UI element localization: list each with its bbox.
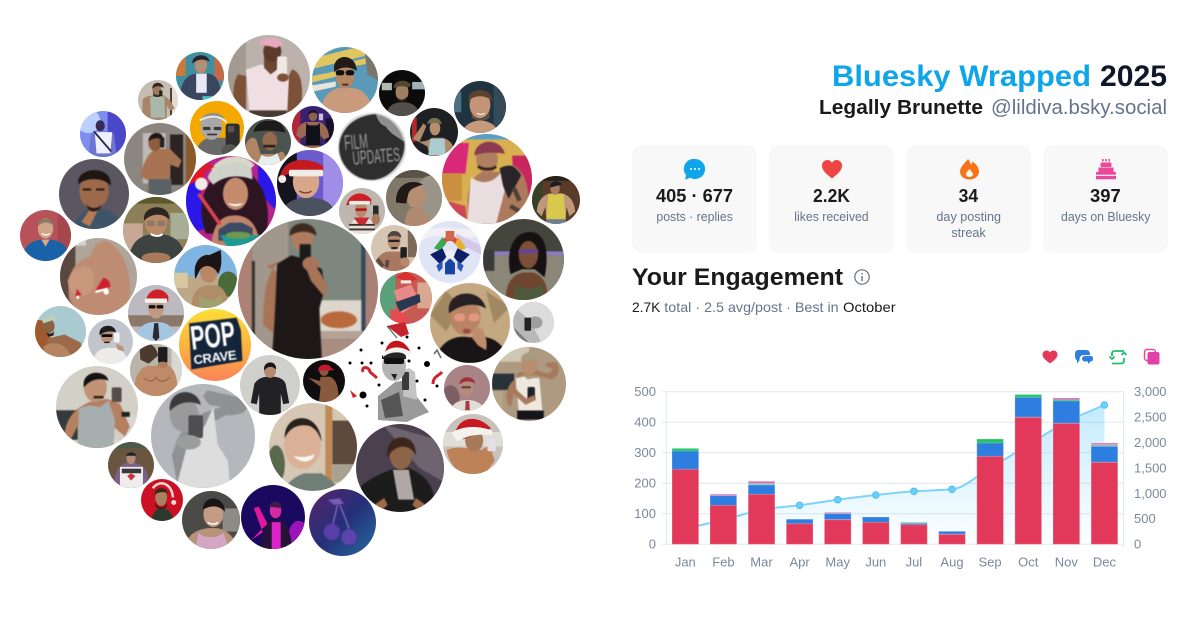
stat card: streak xyxy=(906,145,1031,253)
avatar: cherries xyxy=(309,489,376,556)
christmas cutout sticker xyxy=(345,320,455,430)
icon: info xyxy=(855,270,869,284)
right axis labels xyxy=(1134,384,1167,552)
stat card: posts and replies: 405 · 677 xyxy=(656,186,733,206)
avatar: beach sunglasses xyxy=(312,47,378,113)
avatar: comic xyxy=(380,272,432,324)
cumulative area xyxy=(685,405,1104,544)
avatar: red hat rosy xyxy=(444,365,490,411)
stat card: days on Bluesky xyxy=(1043,145,1168,253)
bar: Jul xyxy=(901,522,927,544)
avatar: plaid shirt xyxy=(176,52,224,100)
bar: Jun xyxy=(862,517,889,544)
month labels: Aug xyxy=(940,554,964,570)
stat card: likes: 2.2K xyxy=(813,186,850,206)
stat card: days on Bluesky: 397 xyxy=(1090,186,1121,206)
avatar: han solo xyxy=(356,424,444,512)
avatar: blue shirt xyxy=(20,210,71,261)
engagement summary: total · 2.5 avg/post · Best in xyxy=(664,299,839,315)
avatar: necklace sunny xyxy=(174,245,237,308)
avatar: rainbow badge xyxy=(419,221,481,283)
right axis labels: 0 xyxy=(1134,536,1141,552)
bar: Apr xyxy=(786,519,813,544)
avatar: glasses selfie tattoos xyxy=(371,225,417,271)
avatar: sunglasses hoodie pout xyxy=(430,283,510,363)
line markers xyxy=(796,402,1108,509)
avatar: santa on red xyxy=(141,479,183,521)
stat card: streak: 34 xyxy=(959,186,978,206)
icon: reply bubbles xyxy=(1075,350,1093,364)
right axis labels: 1,500 xyxy=(1134,460,1167,476)
title: Bluesky Wrapped xyxy=(832,60,1091,93)
right axis labels: 3,000 xyxy=(1134,384,1167,399)
avatar: mirror grey tank xyxy=(56,366,138,448)
avatar: green tee smile xyxy=(123,197,189,263)
user name and handle: @lildiva.bsky.social xyxy=(991,97,1167,119)
avatar: yellow tank xyxy=(532,176,580,224)
avatar: bedroom flex xyxy=(492,347,566,421)
avatar: pool cap tattoos xyxy=(442,134,532,224)
avatar: santa woman xyxy=(186,156,276,246)
avatar: bare chest santa hats xyxy=(60,238,137,315)
left axis labels: 100 xyxy=(634,506,656,521)
bar: Jan xyxy=(672,448,699,544)
right axis labels: 2,000 xyxy=(1134,435,1167,450)
left axis labels: 400 xyxy=(634,414,656,430)
avatar: black and white flex xyxy=(151,384,255,488)
left axis labels: 0 xyxy=(649,536,656,552)
avatar: film updates logo: FILM xyxy=(343,130,369,155)
bar: Nov xyxy=(1053,398,1080,544)
left axis labels: 300 xyxy=(634,445,656,460)
avatar: pop crave logo: CRAVE xyxy=(193,347,238,367)
bar: Dec xyxy=(1091,443,1118,544)
engagement summary xyxy=(632,299,896,315)
bar: May xyxy=(824,512,851,544)
avatar: game character xyxy=(483,219,564,300)
right axis labels: 2,500 xyxy=(1134,410,1167,424)
bar and line chart xyxy=(634,384,1167,570)
avatar: purple tank xyxy=(292,106,334,148)
avatar: purple party xyxy=(241,485,305,549)
icon: flame xyxy=(960,159,979,180)
icon: like heart xyxy=(1042,350,1058,364)
icon: cake xyxy=(1096,159,1116,179)
month labels: Feb xyxy=(712,554,735,570)
avatar: pink bandana xyxy=(228,35,310,117)
avatar: shirtless phone xyxy=(130,344,182,396)
avatar: santa striped xyxy=(339,188,385,234)
avatar: pink tank xyxy=(182,491,240,549)
bar: Sep xyxy=(977,439,1004,544)
stat card: streak: streak xyxy=(951,226,986,240)
icon: chat bubble xyxy=(684,159,705,179)
stat card: posts and replies: posts · replies xyxy=(656,210,733,224)
user name and handle: Legally Brunette xyxy=(819,97,983,119)
month labels: Mar xyxy=(750,554,773,570)
avatar: profile neck xyxy=(386,170,442,226)
icon: repost arrows xyxy=(1110,351,1126,364)
avatar: yellow backdrop cap xyxy=(190,101,244,155)
month labels: Jul xyxy=(906,554,922,570)
avatar: blue lit xyxy=(80,111,126,157)
avatar: big smile selfie xyxy=(269,403,357,491)
avatar: santa hat blue wall xyxy=(277,150,343,216)
avatar: big central mirror selfie xyxy=(238,219,378,359)
avatar: mirror shirtless xyxy=(124,123,196,195)
heading: your engagement: Your Engagement xyxy=(632,264,843,291)
avatar: black shirtless red cap xyxy=(303,360,345,402)
stat card: likes xyxy=(769,145,894,253)
icon: quote squares xyxy=(1144,350,1160,364)
month labels: Jun xyxy=(865,554,886,570)
right axis labels: 1,000 xyxy=(1134,486,1167,501)
bar: Feb xyxy=(710,494,737,544)
avatar: dark car hat xyxy=(379,70,425,116)
month labels: Sep xyxy=(979,554,1002,570)
month labels: Jan xyxy=(675,554,696,570)
cumulative line xyxy=(685,405,1104,528)
avatar: film updates logo xyxy=(338,112,406,182)
bar: Aug xyxy=(939,531,965,544)
engagement summary: October xyxy=(843,299,896,315)
avatar: cowboy hat xyxy=(245,119,291,165)
bars xyxy=(672,394,1118,544)
legend: likes, replies, reposts, quotes xyxy=(1042,350,1160,364)
month labels: Apr xyxy=(789,554,810,570)
engagement summary: 2.7K xyxy=(632,299,661,315)
month labels: Nov xyxy=(1055,554,1078,570)
left axis labels xyxy=(634,384,656,552)
month labels: May xyxy=(825,554,850,570)
avatar: dark close-up xyxy=(59,159,129,229)
avatar: mirror tank xyxy=(138,80,178,120)
avatar: sunglasses white tee xyxy=(88,319,133,364)
grid and axes xyxy=(662,392,1124,548)
avatar: santa shirtless xyxy=(443,414,503,474)
avatar collage xyxy=(20,35,580,556)
avatar: monochrome lying xyxy=(513,302,554,343)
avatar: stubble xyxy=(454,81,506,133)
stat card: likes: likes received xyxy=(794,210,869,224)
avatar: pop crave logo xyxy=(179,309,251,381)
user name and handle xyxy=(819,97,1167,119)
left axis labels: 500 xyxy=(634,384,656,399)
stat card: days on Bluesky: days on Bluesky xyxy=(1061,210,1151,224)
stat card: streak: day posting xyxy=(936,210,1001,224)
avatar: black tee xyxy=(240,355,300,415)
title: 2025 xyxy=(1100,60,1167,93)
bar: Oct xyxy=(1015,394,1042,544)
month labels xyxy=(675,554,1116,570)
stat card: posts and replies xyxy=(632,145,757,253)
left axis labels: 200 xyxy=(634,476,656,490)
month labels: Oct xyxy=(1018,554,1039,570)
month labels: Dec xyxy=(1093,554,1116,570)
bar: Mar xyxy=(748,481,775,544)
icon: heart xyxy=(822,160,842,178)
right axis labels: 500 xyxy=(1134,511,1156,526)
avatar: bandana sign xyxy=(108,442,154,488)
avatar: lying down xyxy=(35,306,86,357)
avatar: santa tie xyxy=(128,285,184,341)
avatar: cap in car xyxy=(410,108,458,156)
